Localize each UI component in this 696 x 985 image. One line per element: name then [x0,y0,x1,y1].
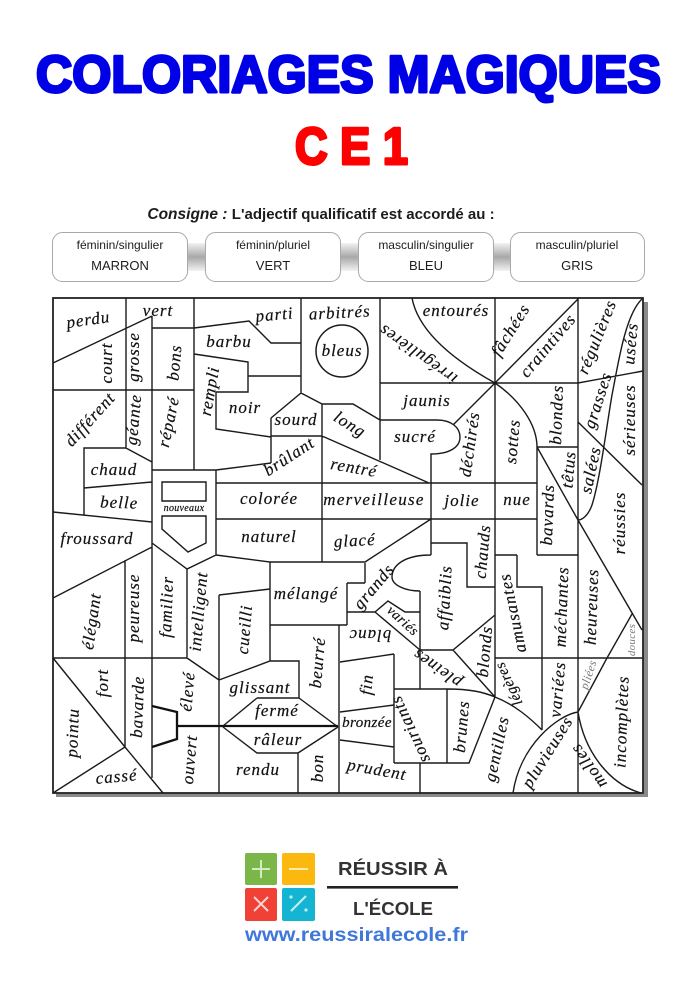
grid adjective words: rentré [329,454,379,481]
logo: Réussir à l'école: L'ÉCOLE [353,898,433,919]
title: COLORIAGES MAGIQUES [36,46,661,104]
colour legend [52,232,644,282]
grid adjective words: cueilli [233,604,256,655]
website url: www.reussiralecole.fr [244,925,469,946]
icon: percent [282,888,315,921]
grid adjective words: peureuse [124,574,143,643]
grid adjective words: froussard [61,529,133,548]
grid adjective words: souriants [386,693,434,766]
grid adjective words: incomplètes [610,675,633,768]
grid adjective words: bavards [537,484,558,546]
grid adjective words: colorée [240,489,298,508]
grid adjective words: merveilleuse [323,490,425,509]
grid adjective words: intelligent [186,571,211,652]
grid adjective words: déchirés [456,410,484,478]
grid adjective words: familier [156,576,177,638]
grid adjective words: sourd [274,410,318,429]
grid adjective words: pluvieuses [517,713,577,792]
grid adjective words: sucré [394,427,436,446]
grid adjective words: nue [503,490,531,509]
grid adjective words: bavarde [127,675,148,738]
grid adjective words: bronzée [342,715,392,731]
grid adjective words: prudent [345,755,408,784]
grid adjective words: court [97,342,116,383]
grid adjective words: régulières [573,297,620,377]
grid adjective words: blondes [546,385,567,445]
colour legend: féminin/singulier [77,238,163,252]
grid adjective words: molles [566,740,611,792]
grid adjective words: bons [163,344,186,381]
grid adjective words: entourés [423,301,489,320]
grid adjective words: long [330,407,369,441]
grid adjective words: blanc [349,626,391,645]
grid adjective words: usées [619,322,642,365]
grid adjective words: fort [93,668,112,697]
grid adjective words: sottes [501,418,524,465]
grid adjective words: belle [100,492,139,513]
grid adjective words: glacé [333,530,377,551]
grid adjective words: géante [122,393,145,446]
grid adjective words: jaunis [401,391,451,410]
grid adjective words: têtus [557,450,580,489]
colour legend: MARRON [91,258,149,273]
grid adjective words: fermé [255,701,299,720]
grid adjective words: glissant [230,678,291,697]
grid adjective words: naturel [241,527,297,546]
grid adjective words: fin [356,673,377,696]
grid adjective words: pliées [577,658,599,692]
icon: plus [245,853,277,885]
grid adjective words: différent [61,388,119,450]
grid adjective words: brunes [450,700,473,753]
icon: multiply [245,888,277,921]
colour legend: GRIS [561,258,593,273]
colour legend: VERT [256,258,290,273]
instruction text: Consigne : L'adjectif qualificatif est accordé au : [147,206,495,223]
grid adjective words: chaud [91,460,137,479]
grid adjective words: grosse [124,332,143,382]
grid adjective words: arbitrés [308,301,371,324]
logo wordmark: RÉUSSIR À [338,858,448,879]
subtitle: class level: C E 1 [295,118,408,176]
colour legend: masculin/pluriel [536,238,618,252]
grid adjective words: méchantes [551,566,572,647]
grid outlines [53,298,643,793]
icon: minus [282,853,315,885]
grid adjective words: blonds [473,625,496,678]
grid adjective words: réparé [154,394,183,449]
grid adjective words: légères [492,659,526,708]
logo: Réussir à l'école [244,853,469,946]
grid adjective words: salées [576,445,605,495]
grid adjective words: beurré [306,636,329,689]
grid adjective words: variés [383,603,421,639]
grid adjective words: élevé [176,670,199,712]
grid adjective words: amusantes [495,572,530,655]
grid adjective words: pointu [62,708,83,759]
grid adjective words: râleur [254,730,302,749]
grid adjective words: heureuses [581,568,602,645]
grid adjective words: douces [626,624,638,656]
grid adjective words: nouveaux [164,503,205,514]
grid adjective words: réussies [610,492,629,554]
grid adjective words: ouvert [178,734,201,785]
panel: magic colouring grid [53,297,648,797]
grid adjective words: jolie [442,491,480,510]
grid adjective words: grands [349,560,398,613]
grid adjective words: barbu [206,332,252,351]
thick bar and keyhole shape [152,706,338,747]
grid adjective words: mélangé [274,584,339,603]
grid adjective words: fâchées [487,300,534,360]
colour legend: BLEU [409,258,443,273]
grid adjective words: parti [254,303,294,326]
grid adjective words: gentilles [480,714,513,783]
grid adjective words: élégant [78,591,105,651]
grid adjective words: vert [143,301,173,320]
grid adjective words: pleines [409,645,466,693]
grid adjective words [61,297,642,792]
grid adjective words: irrégulières [375,320,461,389]
colour legend: féminin/pluriel [236,238,310,252]
grid adjective words: craintives [516,310,580,381]
grid adjective words: cassé [95,765,139,788]
grid adjective words: affaiblis [433,565,456,631]
grid adjective words: sérieuses [620,384,639,456]
grid adjective words: bon [308,754,327,782]
colour legend: masculin/singulier [378,238,474,252]
grid adjective words: brûlant [260,433,318,480]
grid adjective words: variées [546,661,569,718]
grid adjective words: bleus [322,341,362,360]
grid adjective words: noir [229,398,261,417]
grid adjective words: chauds [471,524,494,579]
grid adjective words: grasses [580,370,616,431]
grid adjective words: perdu [64,307,111,332]
grid adjective words: rempli [196,365,223,417]
grid adjective words: rendu [236,760,280,779]
